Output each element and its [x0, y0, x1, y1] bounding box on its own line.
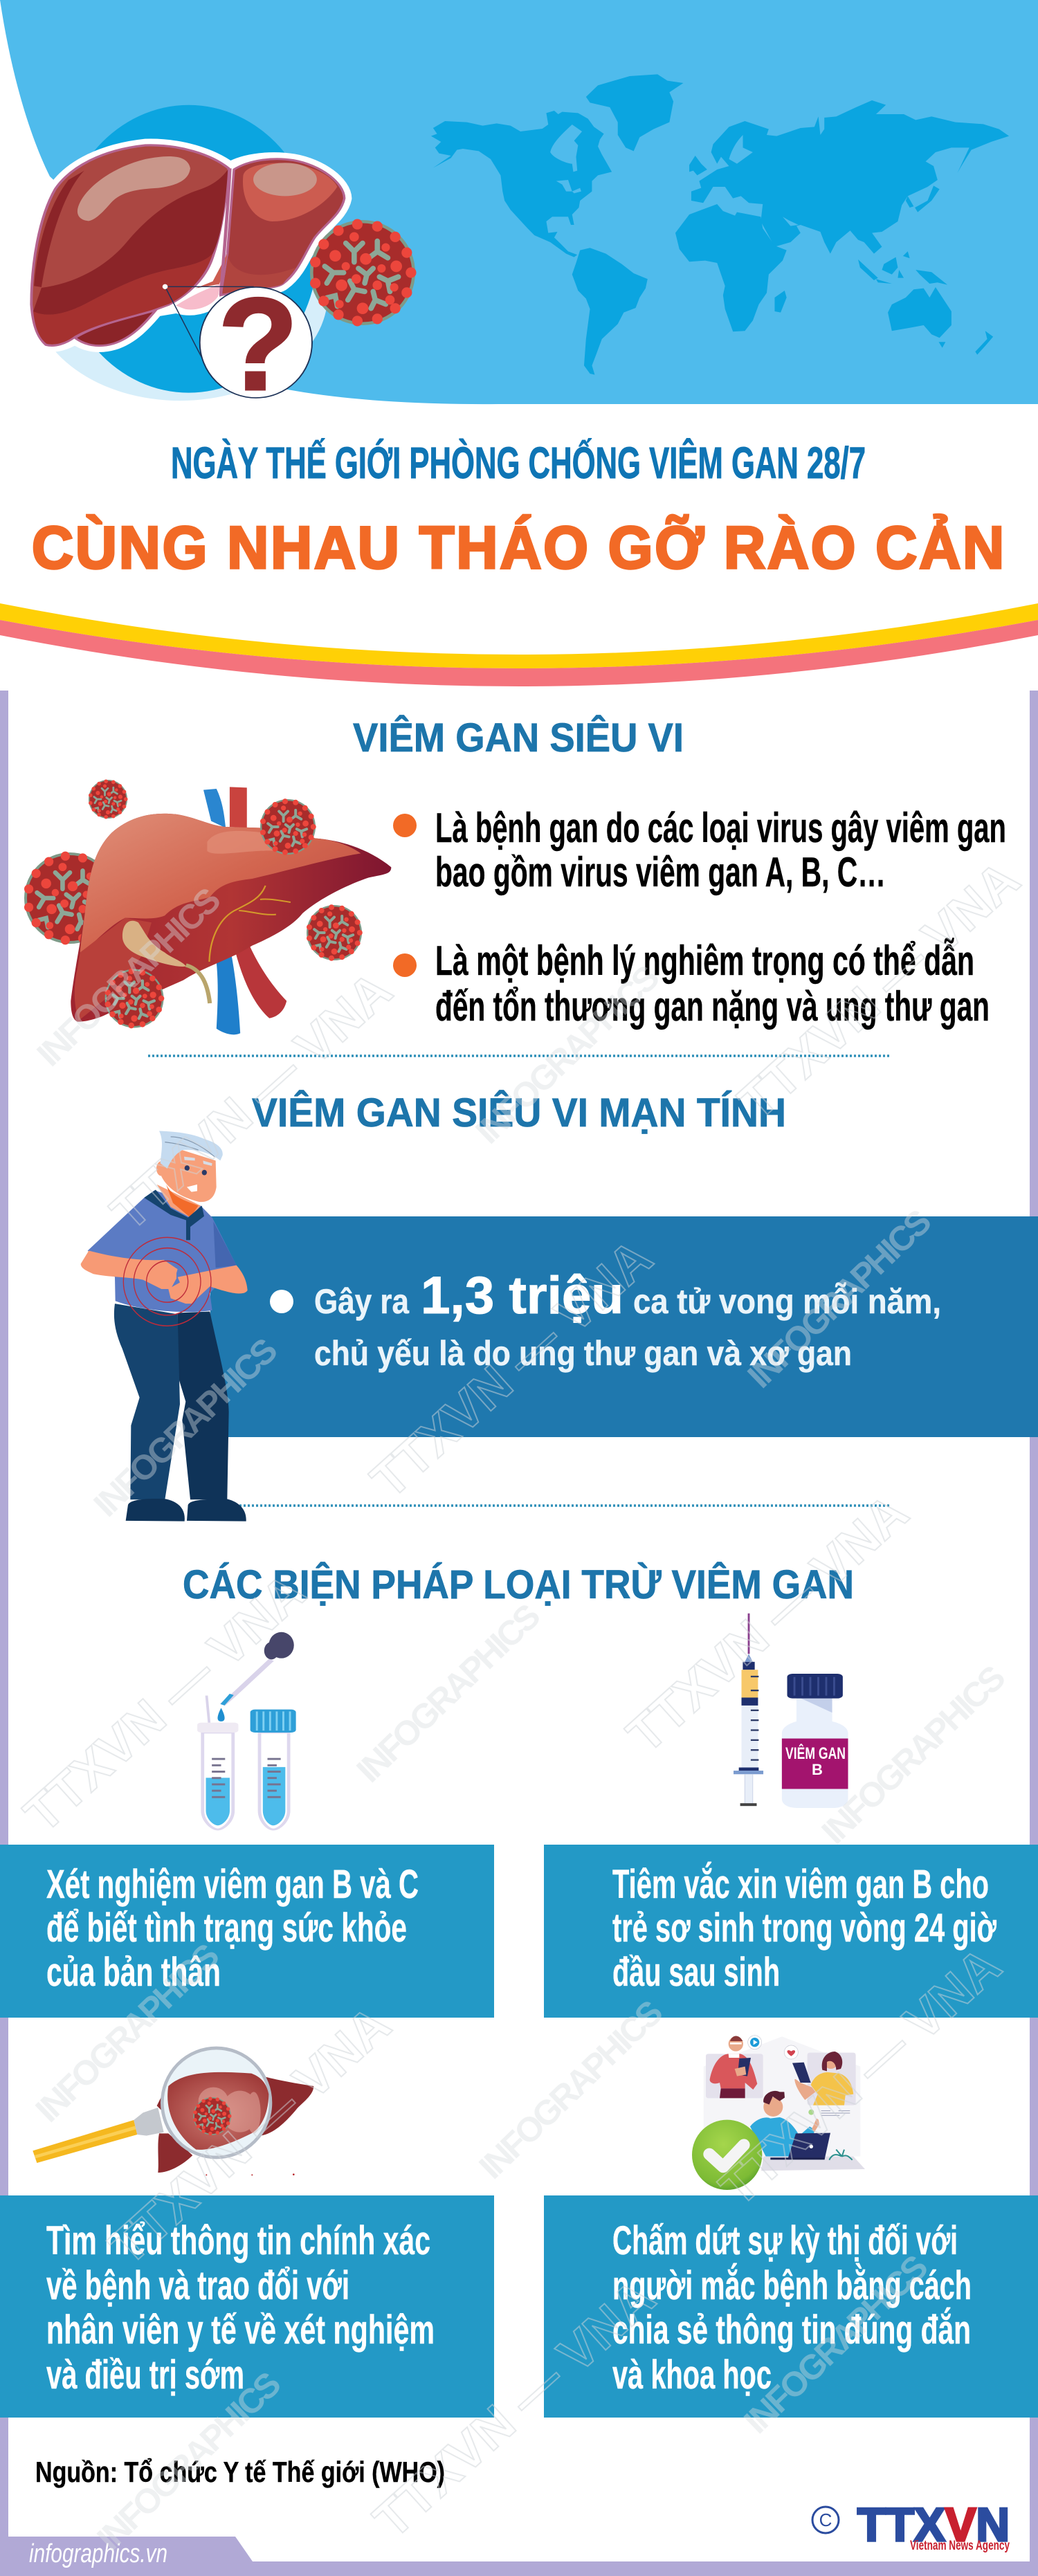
- main title: CÙNG NHAU THÁO GỠ RÀO CẢN: [32, 515, 1006, 581]
- icon: syringe and vaccine vial: [734, 1614, 848, 1808]
- footer tag: infographics.vn: infographics.vn: [29, 2539, 167, 2568]
- watermarks: TTXVN — VNA: [98, 1995, 401, 2276]
- panel: ending stigma: và khoa học: [612, 2353, 772, 2397]
- page side borders and footer bar: [0, 691, 1038, 2576]
- panel: chronic hepatitis band: 1,3 triệu: [421, 1266, 623, 1325]
- panel: accurate information: và điều trị sớm: [46, 2353, 244, 2397]
- watermarks: INFOGRAPHICS: [737, 2247, 936, 2441]
- watermarks: TTXVN — VNA: [616, 1483, 919, 1764]
- panel: vaccination: đầu sau sinh: [612, 1950, 780, 1995]
- panel: accurate information: [0, 2195, 494, 2418]
- illustration: liver with viruses and vessels: [24, 779, 391, 1034]
- header stripes: [0, 603, 1038, 686]
- panel: testing: [0, 1845, 494, 2018]
- watermarks: TTXVN — VNA: [13, 1562, 316, 1843]
- watermarks: INFOGRAPHICS: [86, 1331, 285, 1524]
- panel: accurate information: Tìm hiểu thông tin chính xác: [46, 2218, 430, 2263]
- panel: accurate information: về bệnh và trao đổi với: [46, 2263, 349, 2308]
- icon: people sharing information online with check mark: [692, 2036, 865, 2190]
- watermarks: TTXVN — VNA: [363, 2268, 666, 2549]
- icon: test tubes and dropper: [197, 1632, 296, 1829]
- header background: [0, 0, 1038, 404]
- footer tag: infographics.vn: [0, 2537, 253, 2568]
- watermarks: INFOGRAPHICS: [90, 2364, 289, 2558]
- watermarks: INFOGRAPHICS: [349, 1596, 548, 1790]
- panel: accurate information: nhân viên y tế về xét nghiệm: [46, 2308, 435, 2353]
- watermarks: INFOGRAPHICS: [30, 880, 228, 1074]
- watermarks: TTXVN — VNA: [709, 1936, 1012, 2217]
- heading: elimination measures: CÁC BIỆN PHÁP LOẠI TRỪ VIÊM GAN: [183, 1562, 854, 1607]
- watermarks: INFOGRAPHICS: [468, 958, 667, 1151]
- watermarks: TTXVN — VNA: [727, 850, 1030, 1131]
- panel: vaccination: [544, 1845, 1038, 2018]
- panel: testing: Xét nghiệm viêm gan B và C: [46, 1862, 419, 1907]
- icon: magnifier over liver: [33, 2048, 313, 2175]
- vial label: VIÊM GAN: [785, 1744, 846, 1763]
- panel: testing: của bản thân: [46, 1950, 221, 1995]
- panel: chronic hepatitis band: ca tử vong mỗi năm,: [633, 1282, 941, 1321]
- heading: viêm gan siêu vi: VIÊM GAN SIÊU VI: [353, 715, 684, 760]
- heading: viêm gan siêu vi mạn tính: VIÊM GAN SIÊU VI MẠN TÍNH: [252, 1090, 786, 1135]
- virus: [310, 219, 417, 327]
- illustration: man with stomach pain: [81, 1131, 248, 1522]
- watermarks: TTXVN — VNA: [100, 960, 403, 1241]
- panel: chronic hepatitis band: chủ yếu là do ung thư gan và xơ gan: [314, 1334, 852, 1373]
- watermarks: TTXVN — VNA: [360, 1228, 663, 1509]
- icon: syringe and vaccine vial: B: [812, 1761, 823, 1778]
- icon: liver with question mark and virus: [31, 105, 417, 418]
- watermarks: INFOGRAPHICS: [740, 1202, 939, 1396]
- watermarks: INFOGRAPHICS: [472, 1993, 671, 2186]
- panel: chronic hepatitis band: Gây ra: [314, 1282, 410, 1321]
- watermarks: INFOGRAPHICS: [814, 1658, 1013, 1852]
- panel: ending stigma: [544, 2195, 1038, 2418]
- source line: Nguồn: Tổ chức Y tế Thế giới (WHO): [35, 2456, 445, 2488]
- watermarks: INFOGRAPHICS: [28, 1936, 227, 2130]
- logo: TTXVN: TTXVN: [857, 2499, 1010, 2551]
- panel: testing: để biết tình trạng sức khỏe: [46, 1906, 407, 1951]
- question mark: ?: [218, 271, 298, 418]
- watermarks: [13, 850, 1030, 2558]
- logo: TTXVN: C: [819, 2510, 832, 2530]
- world map: [431, 74, 1009, 375]
- panel: chronic hepatitis band: [210, 1216, 1038, 1437]
- bullet list: hepatitis definition: [393, 805, 1006, 1030]
